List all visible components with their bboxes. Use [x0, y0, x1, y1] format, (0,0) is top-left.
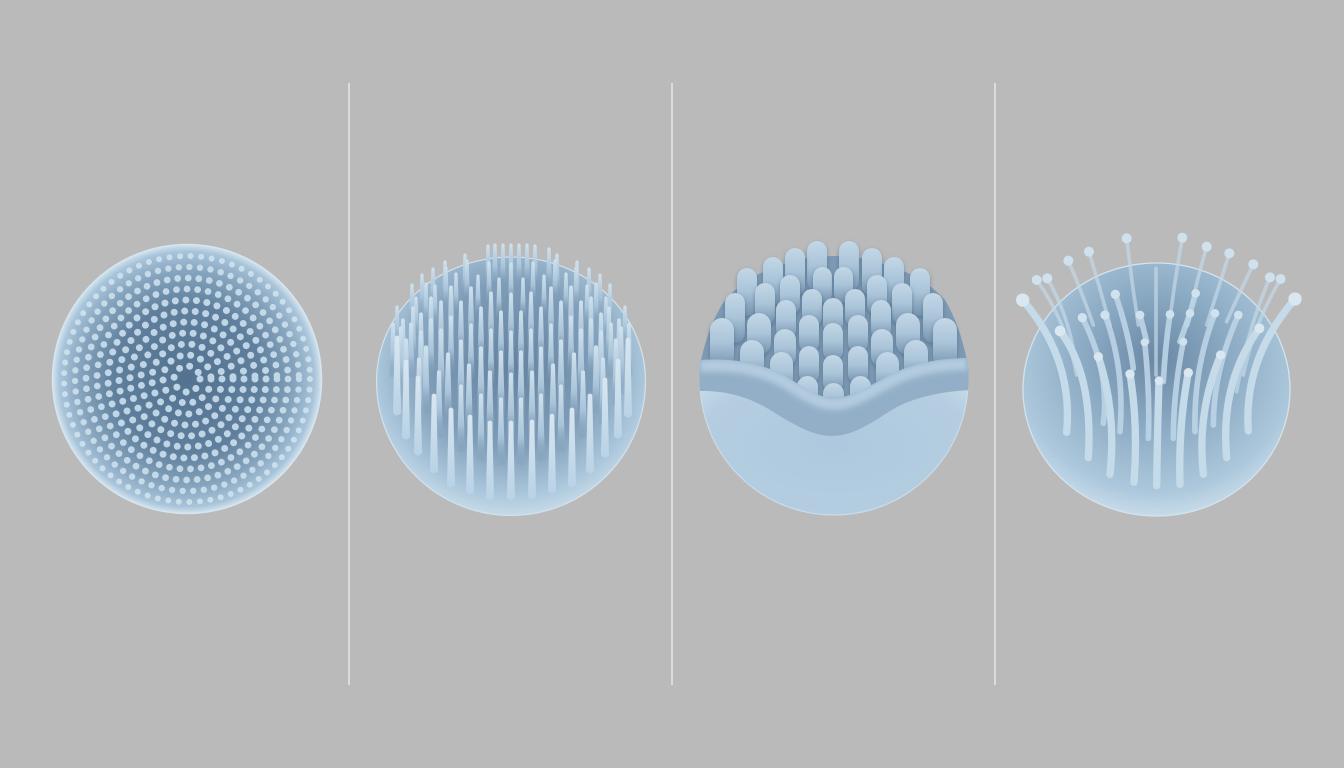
disc base	[52, 244, 322, 514]
pegs	[710, 241, 957, 410]
wave band	[700, 358, 969, 436]
back filaments	[1037, 238, 1281, 392]
disc base	[1023, 263, 1290, 516]
filaments	[1016, 233, 1302, 486]
disc rim	[700, 391, 968, 516]
front filament tips	[1016, 292, 1302, 385]
spikes, back to front	[389, 243, 633, 500]
back filament tips	[1032, 233, 1286, 285]
disc base	[376, 257, 646, 515]
front filaments	[1023, 299, 1295, 486]
panel: disc with tapered spikes	[376, 243, 646, 515]
panel: disc with short round dots	[52, 244, 322, 514]
panel: disc with long curved filaments	[1016, 233, 1302, 516]
middle filaments	[1082, 293, 1238, 438]
panel: disc with round pegs and wave band	[695, 241, 975, 530]
peg bed	[700, 256, 968, 410]
front surface	[700, 390, 968, 514]
middle filament tips	[1078, 289, 1243, 346]
concentric dot rings	[64, 256, 310, 502]
